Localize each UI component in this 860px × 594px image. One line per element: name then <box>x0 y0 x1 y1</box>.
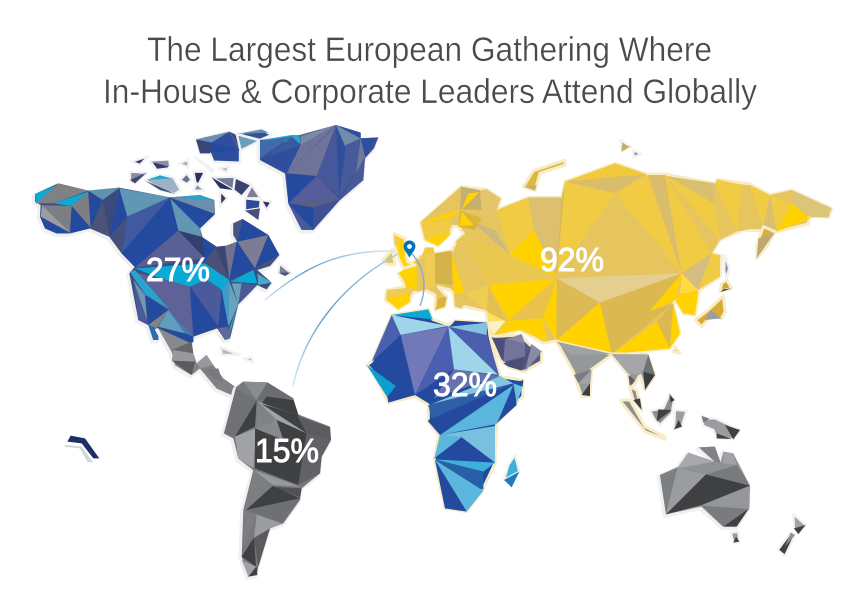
label: South America 15%: 15% <box>255 432 319 469</box>
label: Eurasia 92%: 92% <box>540 241 604 278</box>
region: South Asia and Arabia <box>490 334 665 439</box>
region: UK and Ireland <box>383 233 435 268</box>
icon: Madagascar <box>504 455 519 487</box>
region: Eurasia <box>385 163 832 354</box>
label: Africa 32%: 32% <box>433 366 497 403</box>
region: Indonesia and Australasia <box>650 393 806 556</box>
region: South America <box>223 382 331 578</box>
region: Arctic islands <box>130 129 272 220</box>
title: The Largest European Gathering Where <box>147 31 712 69</box>
title: In-House & Corporate Leaders Attend Globally <box>103 73 757 111</box>
arrow: South America to Europe <box>293 254 398 386</box>
region: Novaya Zemlya, Svalbard and Kamchatka <box>523 140 775 258</box>
icon: chevron mark <box>63 436 99 463</box>
region: Africa <box>367 309 523 512</box>
arrow: Africa to Europe <box>412 254 424 306</box>
region: Central America and Caribbean <box>157 328 253 397</box>
title <box>103 31 757 111</box>
arrow: North America to Europe <box>265 251 396 300</box>
label: North America 27%: 27% <box>146 251 210 288</box>
region: Japan and Sakhalin <box>673 255 732 353</box>
icon: location pin <box>404 240 415 258</box>
region: Greenland <box>259 125 378 232</box>
icon: Newfoundland <box>278 263 291 276</box>
region: North America <box>34 183 291 348</box>
